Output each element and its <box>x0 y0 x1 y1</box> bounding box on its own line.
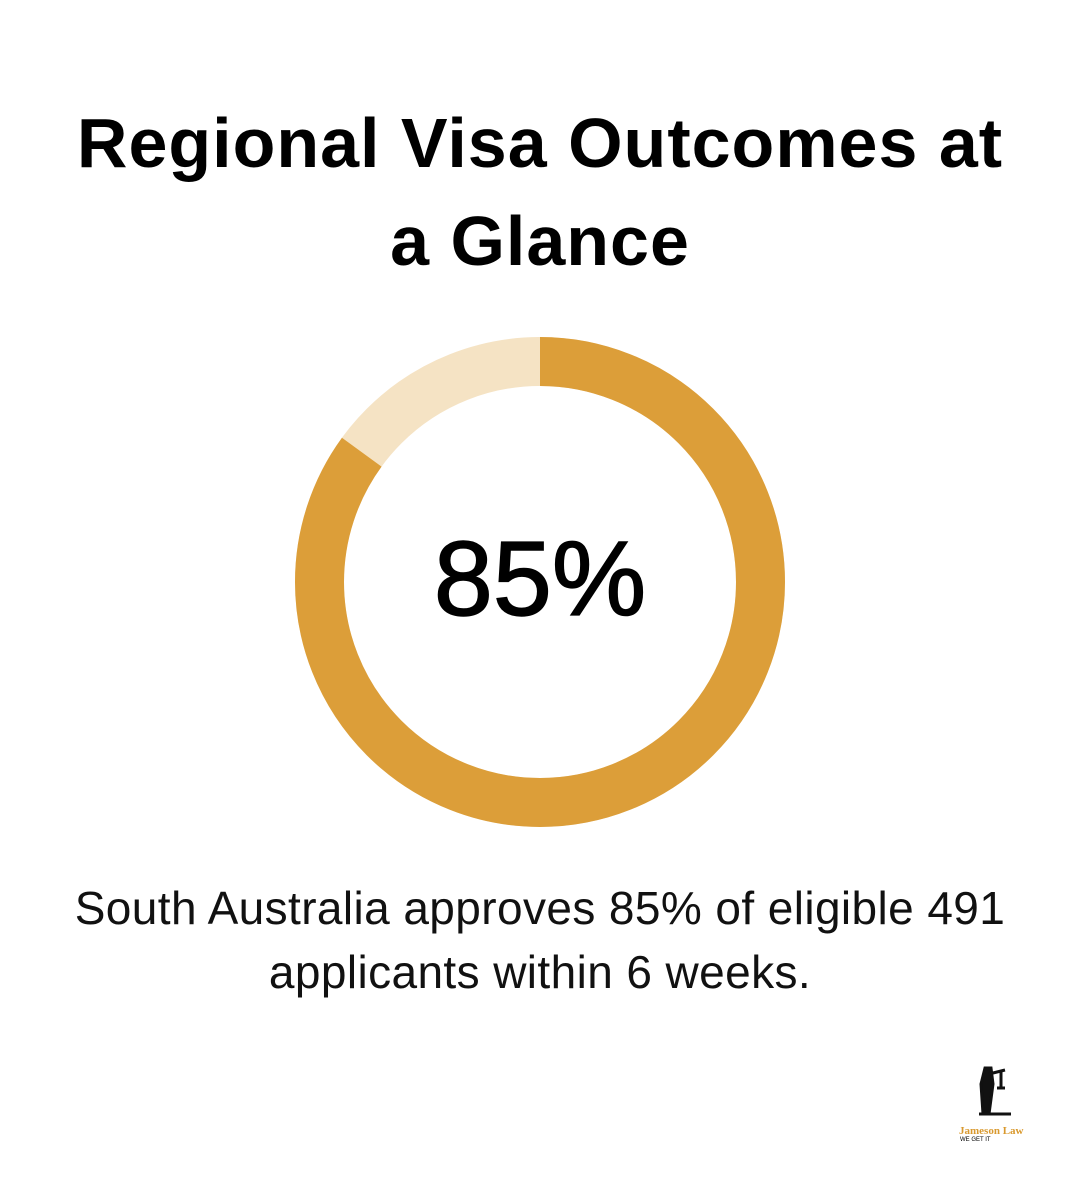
caption <box>75 882 1005 998</box>
icon: justice figure <box>979 1066 1011 1116</box>
title: a Glance <box>390 202 690 280</box>
logo: WE GET IT <box>960 1137 991 1143</box>
logo: Jameson Law <box>959 1125 1023 1137</box>
title <box>77 104 1003 280</box>
caption: applicants within 6 weeks. <box>269 946 811 998</box>
logo <box>959 1066 1024 1143</box>
donut chart: 85% <box>434 520 646 638</box>
caption: South Australia approves 85% of eligible 491 <box>75 882 1005 934</box>
title: Regional Visa Outcomes at <box>77 104 1003 182</box>
